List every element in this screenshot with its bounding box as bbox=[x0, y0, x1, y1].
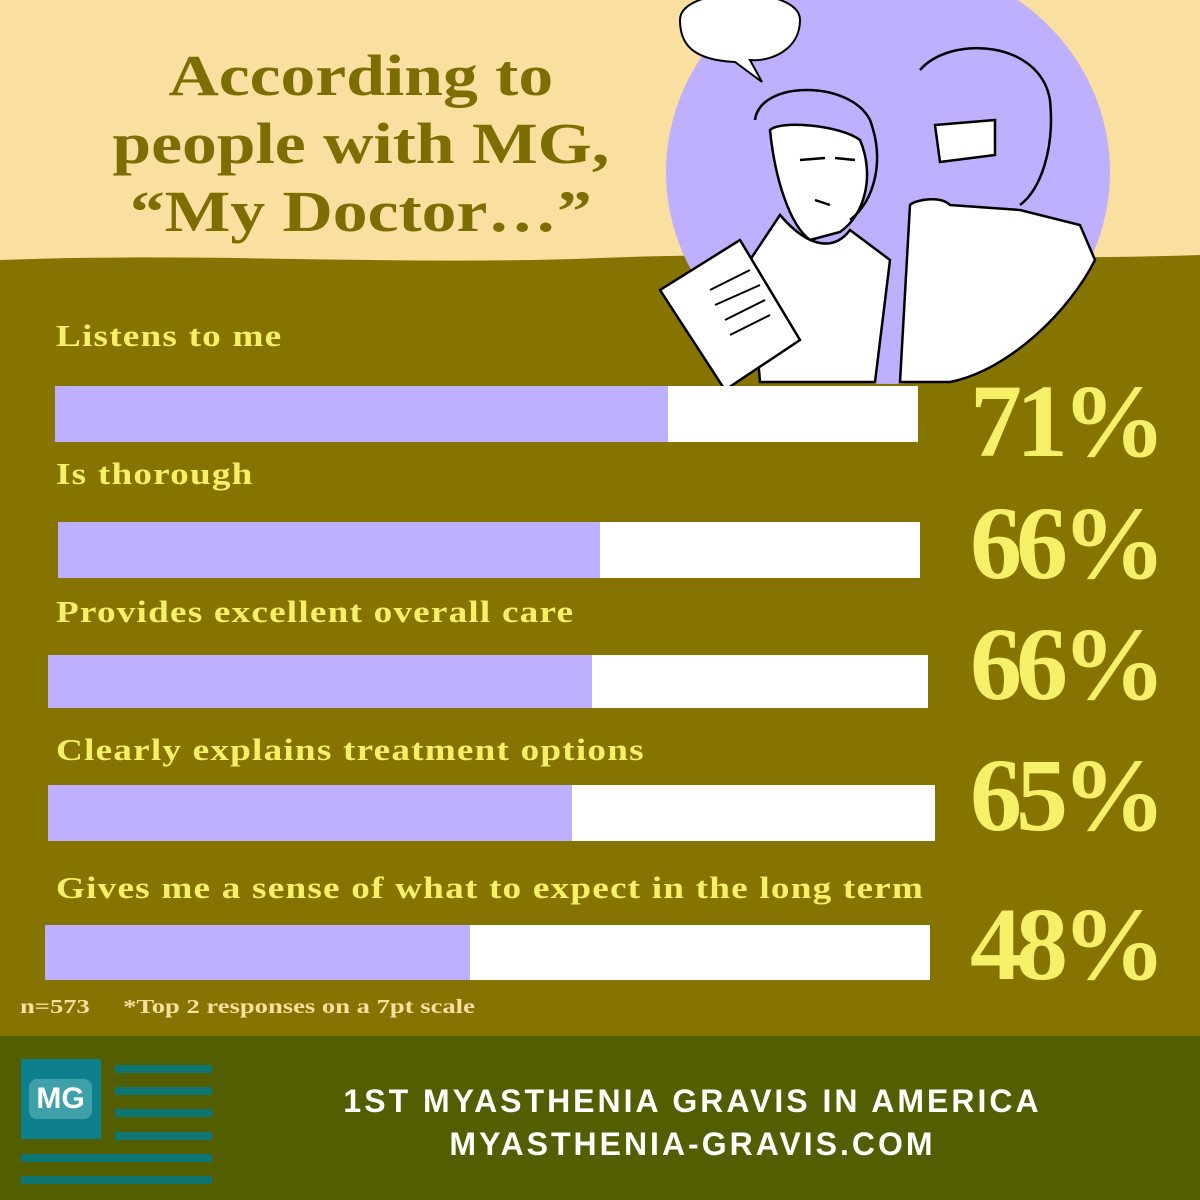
footer text: MYASTHENIA-GRAVIS.COM bbox=[449, 1126, 936, 1162]
title: “My Doctor…” bbox=[130, 179, 592, 244]
illustration: doctors bbox=[658, 0, 1110, 386]
row 4 percent: 65% bbox=[970, 738, 1160, 853]
row 3 percent: 66% bbox=[970, 607, 1160, 722]
row 5 bar bbox=[45, 925, 930, 980]
row 4 bar bbox=[48, 785, 935, 841]
row 2 percent: 66% bbox=[970, 486, 1160, 601]
row 5 label: Gives me a sense of what to expect in the long term bbox=[56, 870, 924, 905]
logo bbox=[21, 1059, 212, 1184]
title: people with MG, bbox=[112, 111, 609, 176]
logo: MG bbox=[36, 1082, 85, 1115]
speech bubble bbox=[680, 0, 800, 82]
row 2 label: Is thorough bbox=[56, 456, 254, 491]
title: According to bbox=[168, 43, 553, 108]
row 3 bar bbox=[48, 655, 928, 708]
row 5 percent: 48% bbox=[970, 887, 1160, 1002]
row 4 label: Clearly explains treatment options bbox=[56, 732, 645, 767]
row 1 bar bbox=[55, 386, 918, 442]
footer text bbox=[343, 1083, 1042, 1162]
row 1 label: Listens to me bbox=[56, 318, 282, 353]
footnote: n=573 *Top 2 responses on a 7pt scale bbox=[20, 996, 475, 1018]
footer bbox=[0, 1036, 1200, 1200]
footer text: 1ST MYASTHENIA GRAVIS IN AMERICA bbox=[343, 1083, 1042, 1119]
title bbox=[112, 43, 609, 244]
row 2 bar bbox=[58, 522, 920, 578]
row 3 label: Provides excellent overall care bbox=[56, 594, 574, 629]
row 1 percent: 71% bbox=[970, 364, 1160, 479]
